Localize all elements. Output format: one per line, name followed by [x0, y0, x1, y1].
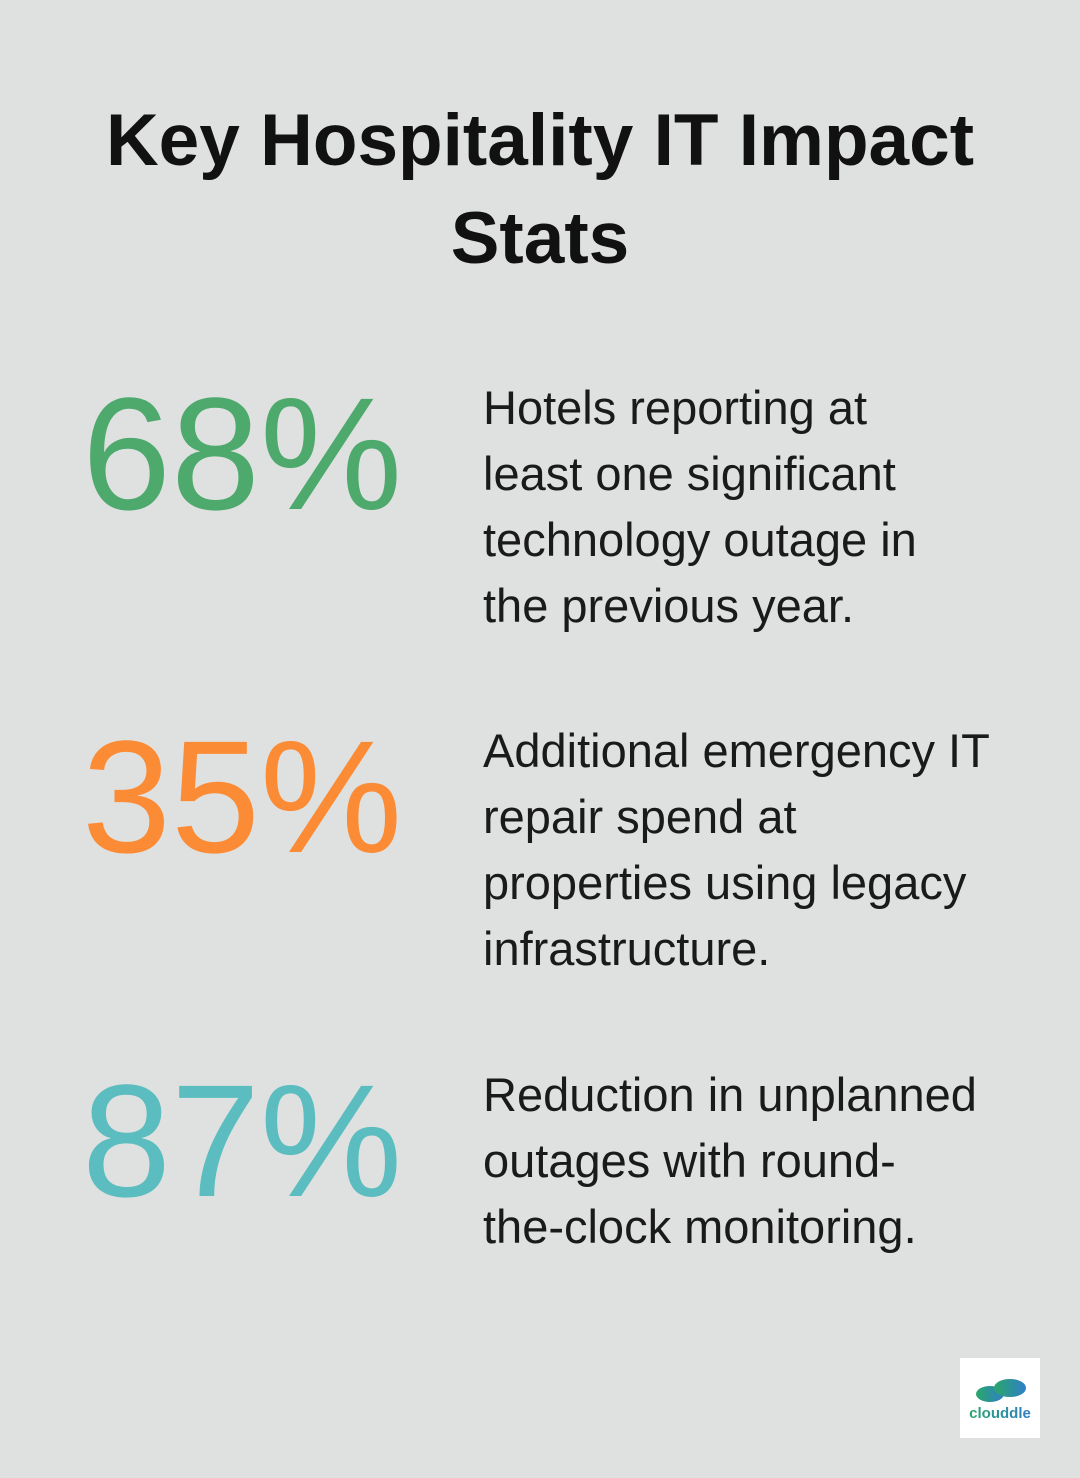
stat 1 text: least one significant — [483, 447, 896, 500]
logo — [960, 1358, 1040, 1438]
stat 1 text: the previous year. — [483, 579, 854, 632]
stat 3 text: Reduction in unplanned — [483, 1068, 977, 1121]
title: Stats — [451, 198, 629, 279]
stat 2 text: properties using legacy — [483, 856, 966, 909]
stat 3 text — [483, 1068, 977, 1253]
logo: clouddle — [969, 1405, 1031, 1422]
stat 2 text: Additional emergency IT — [483, 724, 990, 777]
stat 3 text: the-clock monitoring. — [483, 1200, 917, 1253]
stat 2 text: infrastructure. — [483, 922, 770, 975]
stat 2 number: 35% — [82, 707, 402, 886]
stat 2 text — [483, 724, 990, 975]
stat 1 text: technology outage in — [483, 513, 917, 566]
stat 3 text: outages with round- — [483, 1134, 896, 1187]
stat 3 number: 87% — [82, 1051, 402, 1230]
stat 1 number: 68% — [82, 364, 402, 543]
title: Key Hospitality IT Impact — [106, 100, 974, 181]
stat 1 text: Hotels reporting at — [483, 381, 867, 434]
stat 1 text — [483, 381, 917, 632]
title — [106, 100, 974, 279]
stat 2 text: repair spend at — [483, 790, 797, 843]
